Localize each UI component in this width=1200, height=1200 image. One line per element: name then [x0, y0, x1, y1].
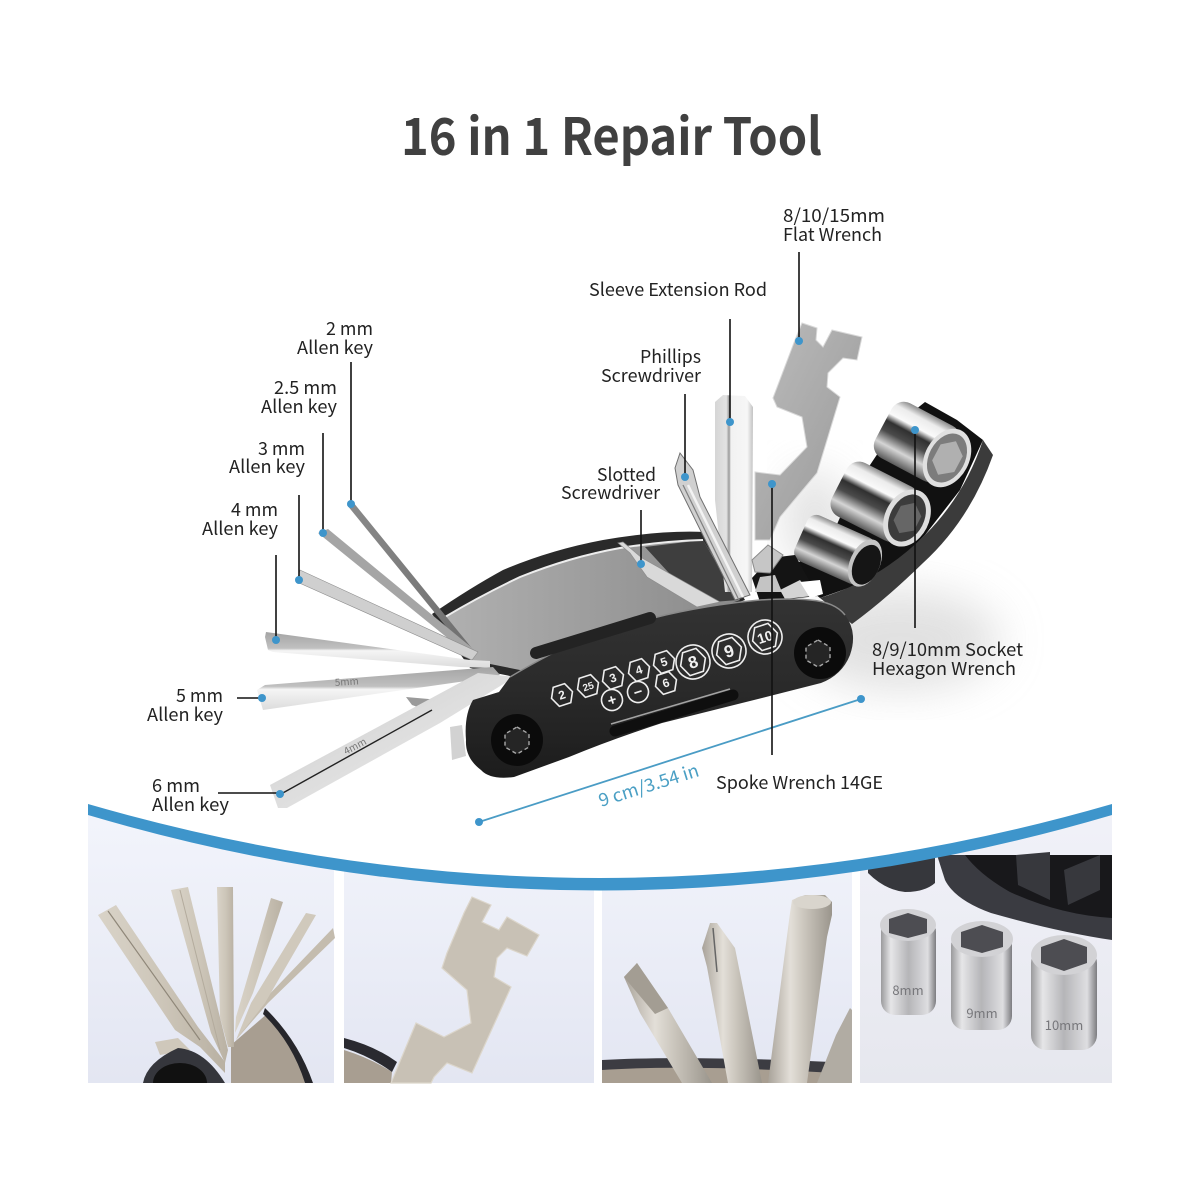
socket: 8 mm: 8mm [892, 980, 924, 999]
socket: 8 mm [880, 909, 936, 1015]
size markings: 9 [722, 641, 737, 662]
label: sleeve extension rod: Sleeve Extension Rod [589, 276, 767, 302]
key: 2 mm [347, 502, 475, 656]
label: phillips screwdriver: Screwdriver [601, 362, 702, 388]
label: 6 mm Allen key: Allen key [152, 791, 230, 817]
size markings: + [605, 691, 619, 710]
label: phillips screwdriver [601, 343, 702, 481]
label: 6 mm Allen key [152, 772, 284, 817]
label: spoke wrench: Spoke Wrench 14GE [716, 769, 883, 795]
key: 5 mm [257, 667, 500, 710]
Allen keys fan [257, 502, 515, 808]
label: socket hexagon wrench: Hexagon Wrench [872, 655, 1016, 681]
label: spoke wrench [716, 480, 883, 795]
size markings: 4 [634, 662, 645, 678]
label: 6 mm Allen key: 6 mm [152, 772, 200, 798]
label: 3 mm Allen key: Allen key [229, 453, 306, 479]
socket: 9 mm [951, 921, 1013, 1030]
size markings: 10 [755, 627, 775, 647]
label: 2 mm Allen key: Allen key [297, 334, 374, 360]
socket: 8 mm [791, 512, 889, 592]
label: 2 mm Allen key: 2 mm [326, 315, 373, 341]
dimension line [475, 695, 865, 826]
label: 3 mm Allen key [229, 435, 306, 584]
size markings: 6 [661, 675, 672, 691]
socket holder [795, 402, 993, 624]
dimension line: 9 cm/3.54 in [595, 757, 702, 813]
photo strip: four detail photos [88, 800, 1112, 1083]
label: 5 mm Allen key: 5 mm [176, 682, 223, 708]
size markings: 8 [686, 652, 701, 673]
photo: Allen keys [88, 800, 335, 1083]
size markings: 3 [608, 670, 619, 686]
label: phillips screwdriver: Phillips [640, 343, 701, 369]
Allen keys fan: 4mm [340, 733, 369, 758]
label: socket hexagon wrench [872, 426, 1023, 681]
label: 4 mm Allen key [202, 496, 280, 644]
socket: 9 mm [826, 457, 940, 555]
size markings: − [631, 683, 645, 702]
flat wrench [755, 323, 862, 540]
size markings [548, 616, 786, 713]
upper slot [536, 618, 650, 653]
phillips screwdriver [675, 453, 750, 600]
socket: 9 mm: 9mm [966, 1003, 998, 1022]
label: flat wrench [783, 202, 885, 345]
size markings: 25 [581, 680, 596, 694]
key: 3 mm [297, 570, 478, 660]
label: 4 mm Allen key: Allen key [202, 515, 279, 541]
handle with markings [466, 599, 853, 778]
label: slotted screwdriver: Screwdriver [561, 479, 661, 505]
small hinge piece behind keys [406, 695, 462, 715]
center hex bolt [752, 545, 823, 602]
soft shadow behind tool [785, 470, 1000, 690]
bolt: left [491, 714, 543, 766]
label: slotted screwdriver [561, 461, 661, 568]
socket: 10 mm [869, 397, 981, 496]
label: 3 mm Allen key: 3 mm [258, 435, 305, 461]
back plate [432, 532, 745, 680]
bolt: right [794, 627, 846, 679]
label: sleeve extension rod [589, 276, 767, 426]
key: 6 mm [270, 673, 515, 808]
sockets [791, 397, 981, 592]
photo: screwdrivers and rod [602, 800, 852, 1083]
label: flat wrench: Flat Wrench [783, 221, 882, 247]
lower bracket [450, 725, 466, 760]
label: 2.5 mm Allen key [261, 374, 338, 537]
socket: 10 mm [1031, 935, 1097, 1050]
key: 4 mm [265, 632, 490, 668]
label: 4 mm Allen key: 4 mm [231, 496, 278, 522]
title: 16 in 1 Repair Tool [401, 96, 822, 170]
size markings: 5 [659, 654, 670, 670]
label: 5 mm Allen key: Allen key [147, 701, 224, 727]
label: slotted screwdriver: Slotted [597, 461, 656, 487]
label: 2 mm Allen key [297, 315, 374, 508]
label: 2.5 mm Allen key: Allen key [261, 393, 338, 419]
label: socket hexagon wrench: 8/9/10mm Socket [872, 636, 1023, 662]
label: flat wrench: 8/10/15mm [783, 202, 885, 228]
slotted screwdriver [618, 542, 720, 607]
photo: flat wrench [344, 800, 594, 1083]
size markings: 2 [557, 687, 568, 703]
socket: 10 mm: 10mm [1045, 1015, 1083, 1034]
lower slot [615, 695, 733, 731]
Allen keys fan: 5mm [334, 672, 359, 689]
key: 2.5 mm [318, 529, 477, 657]
label: 5 mm Allen key [147, 682, 266, 727]
sleeve extension rod [715, 395, 753, 592]
multi-tool illustration [257, 323, 993, 808]
photo: three sockets [860, 800, 1112, 1083]
label: 2.5 mm Allen key: 2.5 mm [274, 374, 337, 400]
